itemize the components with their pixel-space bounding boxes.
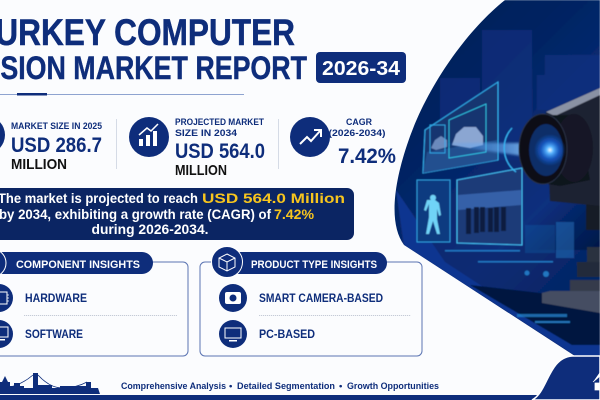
footer tagline: Comprehensive Analysis bbox=[121, 381, 226, 392]
stat: projected market size 2034: MILLION bbox=[175, 162, 227, 179]
stat: market size 2025: MILLION bbox=[11, 156, 67, 173]
footer corner bbox=[532, 356, 600, 400]
panel: product type insights: SMART CAMERA-BASED bbox=[259, 293, 383, 305]
city buildings bbox=[440, 30, 600, 160]
panel: component insights bbox=[0, 249, 188, 356]
icon: market size bbox=[0, 116, 5, 154]
icon: box bbox=[212, 246, 242, 278]
icon: trend arrow bbox=[290, 117, 330, 157]
icon: software monitor bbox=[0, 320, 13, 348]
stat: market size 2025: USD 286.7 bbox=[11, 134, 102, 157]
light beam bbox=[450, 142, 520, 157]
panel: component insights: SOFTWARE bbox=[25, 329, 83, 341]
summary callout: during 2026-2034. bbox=[92, 222, 208, 237]
stat: market size 2025: MARKET SIZE IN 2025 bbox=[11, 121, 102, 131]
panel: product type insights: PC-BASED bbox=[259, 329, 315, 341]
stat: projected market size 2034 bbox=[129, 117, 265, 179]
year badge bbox=[316, 52, 406, 83]
stat: projected market size 2034: PROJECTED MARKET bbox=[175, 117, 265, 127]
footer tagline: • bbox=[339, 381, 343, 392]
year badge: 2026-34 bbox=[322, 58, 401, 80]
data grid bbox=[445, 222, 574, 323]
icon: rising bar chart bbox=[129, 117, 169, 157]
heading pill bbox=[225, 252, 387, 274]
AR panel: cars bbox=[423, 82, 498, 173]
summary callout: 7.42% bbox=[274, 207, 314, 222]
hero image: camera and city bbox=[380, 0, 600, 360]
stat: projected market size 2034: USD 564.0 bbox=[175, 140, 265, 163]
summary callout: USD 564.0 Million bbox=[202, 191, 345, 206]
heading pill: COMPONENT INSIGHTS bbox=[16, 259, 140, 271]
footer tagline: • bbox=[229, 381, 233, 392]
stat: market size 2025 bbox=[0, 116, 102, 173]
camera bbox=[519, 88, 600, 206]
footer tagline: Growth Opportunities bbox=[347, 381, 439, 392]
summary callout: by 2034, exhibiting a growth rate (CAGR) of bbox=[0, 207, 271, 222]
footer tagline: Detailed Segmentation bbox=[237, 381, 335, 392]
panel: component insights: HARDWARE bbox=[25, 293, 87, 305]
stat: CAGR: (2026-2034) bbox=[328, 128, 386, 138]
heading pill: PRODUCT TYPE INSIGHTS bbox=[251, 259, 377, 271]
stat: CAGR: CAGR bbox=[346, 117, 373, 127]
skyline illustration bbox=[0, 373, 100, 394]
icon: PC monitor bbox=[219, 320, 247, 348]
panel: product type insights bbox=[200, 246, 422, 356]
AR panel: people bbox=[457, 168, 522, 245]
summary callout: The market is projected to reach bbox=[0, 191, 198, 206]
summary callout bbox=[0, 188, 354, 240]
AR panel: person bbox=[417, 180, 450, 242]
icon: chip bbox=[0, 284, 13, 312]
icon: camera bbox=[219, 284, 247, 312]
footer bar bbox=[0, 395, 600, 400]
footer tagline bbox=[121, 381, 439, 392]
stat: projected market size 2034: SIZE IN 2034 bbox=[175, 128, 237, 138]
heading pill bbox=[0, 249, 153, 277]
stat: CAGR bbox=[290, 117, 396, 168]
camera mount bbox=[542, 204, 600, 313]
stat: CAGR: 7.42% bbox=[338, 145, 396, 168]
title underline bbox=[0, 93, 244, 96]
